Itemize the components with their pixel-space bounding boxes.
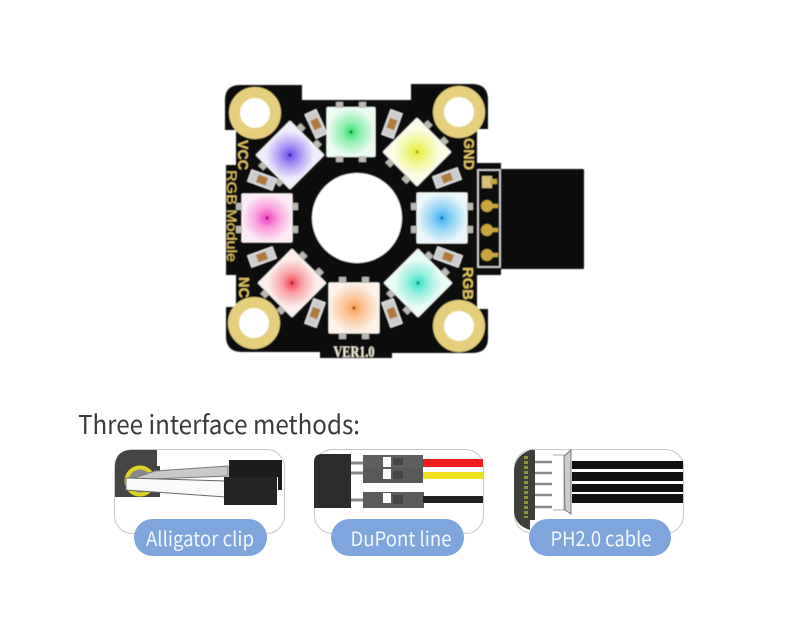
connector flange xyxy=(564,450,571,514)
silkscreen: RGB Module: RGB Module xyxy=(224,170,240,262)
LED: red xyxy=(254,245,330,321)
LED: blue xyxy=(411,193,473,243)
capacitors xyxy=(248,110,462,327)
card outline xyxy=(114,450,284,534)
connector housing xyxy=(498,169,584,269)
clip upper jaw xyxy=(128,466,228,480)
silkscreen: version: VER1.0 xyxy=(334,344,374,361)
label: DuPont line xyxy=(350,523,452,552)
LED: yellow xyxy=(379,114,455,190)
silkscreen: VCC: VCC xyxy=(234,140,251,170)
housing bottom xyxy=(363,492,424,508)
label: Alligator clip xyxy=(146,523,254,552)
pins xyxy=(535,462,552,507)
label pill xyxy=(331,519,464,556)
wires xyxy=(572,461,683,503)
clip lower jaw xyxy=(126,478,226,497)
RGB module product photo xyxy=(224,84,584,361)
header pads xyxy=(481,176,498,261)
LED: purple xyxy=(252,117,328,193)
silkscreen: RGB: RGB xyxy=(459,267,476,300)
center hole xyxy=(312,173,402,263)
LED: orange xyxy=(329,277,379,339)
housing middle xyxy=(363,468,423,483)
yellow pad xyxy=(126,468,154,494)
housing latches xyxy=(393,458,403,504)
LED: pink xyxy=(236,194,298,242)
panel: DuPont line xyxy=(314,450,484,556)
silkscreen: NC: NC xyxy=(235,277,252,298)
card outline xyxy=(314,450,484,534)
dark module edge xyxy=(115,450,160,497)
silkscreen: GND: GND xyxy=(460,138,477,170)
clip boot front xyxy=(224,477,277,505)
yellow wire xyxy=(423,472,483,479)
housing top xyxy=(363,455,423,468)
label: PH2.0 cable xyxy=(550,523,652,552)
black wire xyxy=(423,496,483,503)
LED: green xyxy=(327,102,375,162)
red wire xyxy=(423,459,483,467)
LED: teal xyxy=(380,245,456,321)
black connector xyxy=(314,454,351,508)
housing windows xyxy=(383,457,391,503)
module markings xyxy=(524,456,528,518)
card outline xyxy=(514,450,684,534)
header outline xyxy=(478,170,500,267)
circuit board xyxy=(225,84,501,358)
connector housing xyxy=(553,455,564,510)
dark module edge xyxy=(514,450,535,530)
label pill xyxy=(529,519,671,556)
panel: PH2.0 cable xyxy=(514,450,684,556)
mounting holes xyxy=(234,92,480,346)
panel: alligator clip xyxy=(114,450,284,556)
heading: Three interface methods: xyxy=(78,405,360,442)
clip boot rear xyxy=(229,460,282,490)
pins xyxy=(351,463,364,500)
label pill xyxy=(134,519,267,556)
